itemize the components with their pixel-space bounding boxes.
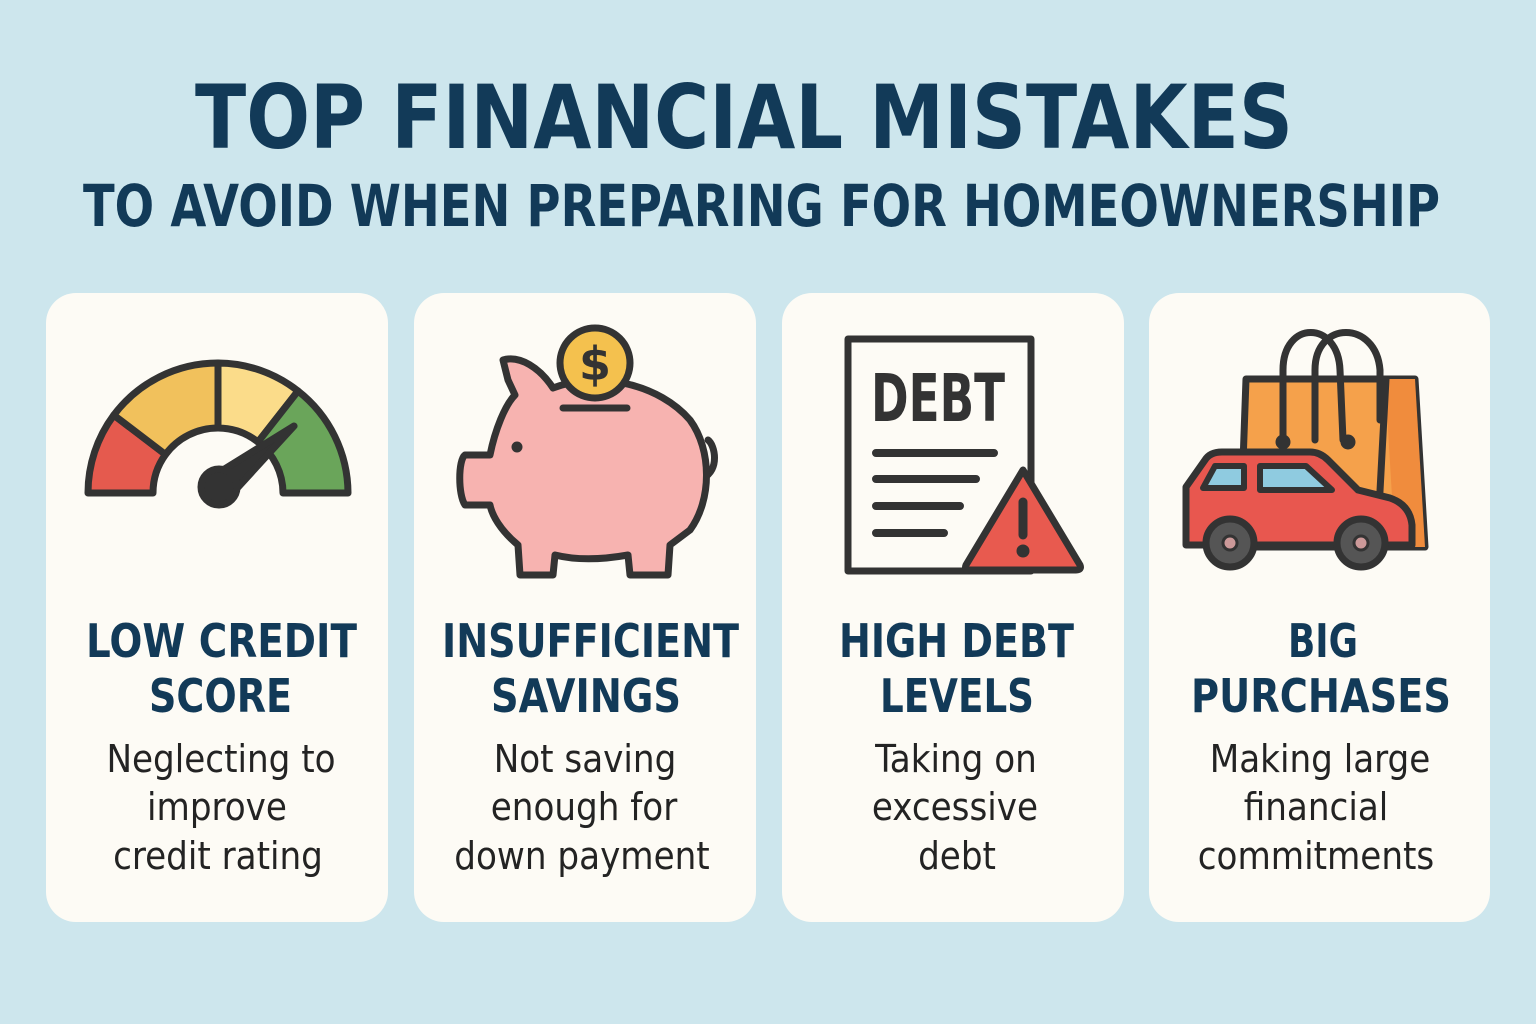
description bbox=[454, 737, 710, 878]
panel: insufficient savings bbox=[414, 293, 756, 922]
description bbox=[872, 737, 1038, 878]
icon: credit gauge bbox=[88, 363, 348, 505]
description: Making large bbox=[1210, 737, 1430, 781]
description: enough for bbox=[491, 785, 678, 829]
icon: shopping bag and car bbox=[1186, 332, 1425, 567]
heading: HIGH DEBT bbox=[839, 614, 1075, 668]
heading: INSUFFICIENT bbox=[442, 614, 740, 668]
description: debt bbox=[918, 834, 996, 878]
title: TOP FINANCIAL MISTAKES bbox=[195, 66, 1293, 169]
description: improve bbox=[147, 785, 287, 829]
description: financial bbox=[1244, 785, 1388, 829]
panel: insufficient savings: SAVINGS bbox=[491, 669, 681, 723]
heading: BIG bbox=[1288, 614, 1358, 668]
panel: big purchases: PURCHASES bbox=[1191, 669, 1451, 723]
icon: debt document with warning bbox=[848, 339, 1080, 571]
panel: low credit score bbox=[46, 293, 388, 922]
panel: high debt levels: LEVELS bbox=[880, 669, 1034, 723]
description: excessive bbox=[872, 785, 1038, 829]
icon: piggy bank bbox=[460, 328, 714, 575]
heading: LOW CREDIT bbox=[86, 614, 358, 668]
description: commitments bbox=[1198, 834, 1434, 878]
description: Not saving bbox=[494, 737, 676, 781]
icon: debt document with warning: DEBT bbox=[871, 360, 1005, 437]
description bbox=[1198, 737, 1434, 878]
description: credit rating bbox=[113, 834, 323, 878]
panel: big purchases bbox=[1149, 293, 1490, 922]
description bbox=[106, 737, 336, 878]
description: Taking on bbox=[874, 737, 1037, 781]
title bbox=[83, 66, 1440, 240]
panel: low credit score: SCORE bbox=[149, 669, 292, 723]
description: Neglecting to bbox=[106, 737, 336, 781]
description: down payment bbox=[454, 834, 710, 878]
panel: high debt levels bbox=[782, 293, 1124, 922]
icon: piggy bank: $ bbox=[579, 337, 611, 391]
